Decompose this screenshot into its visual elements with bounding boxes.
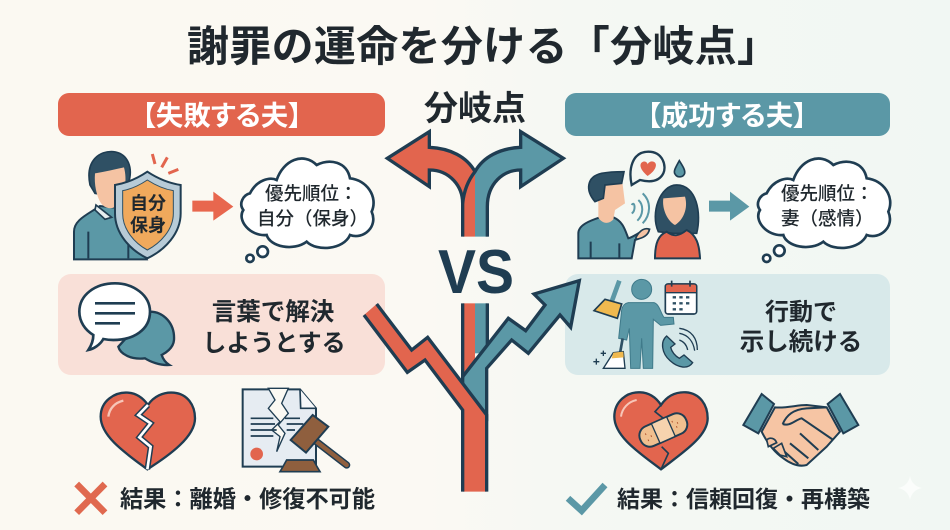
icon: check mark — [568, 485, 605, 511]
VS: VS — [438, 238, 514, 307]
icon: X mark — [77, 484, 105, 513]
thought cloud: left: 優先順位： — [265, 183, 358, 204]
thought cloud: left: 自分（保身） — [257, 208, 368, 229]
icon: broken heart — [101, 393, 195, 469]
icon: speech bubbles — [79, 283, 174, 365]
arrow: right to thought — [709, 192, 749, 221]
thought cloud: right: 優先順位： — [781, 183, 874, 204]
icon: man behind shield: 保身 — [130, 216, 166, 236]
icon: torn document and gavel — [243, 388, 347, 472]
thought cloud: right: 妻（感情） — [781, 208, 874, 229]
right action panel: 示し続ける — [740, 328, 862, 356]
left action panel — [58, 274, 385, 375]
icon: man behind shield: 自分 — [130, 193, 166, 213]
thought cloud: right — [758, 159, 890, 262]
diverging zigzag arrows — [364, 281, 579, 492]
left result text: 結果：離婚・修復不可能 — [120, 486, 375, 512]
forked arrow at top — [387, 132, 563, 237]
right header: successful husband: 【成功する夫】 — [647, 100, 807, 131]
right header: successful husband — [565, 93, 890, 136]
left header: failing husband — [58, 93, 385, 136]
panel text: words: 言葉で解決 — [212, 298, 334, 326]
center label: turning point: 分岐点 — [424, 90, 526, 128]
panel text: actions: 行動で — [765, 299, 837, 326]
thought cloud: left — [241, 159, 374, 262]
icon: cleaning, calendar, phone — [593, 279, 697, 368]
right action panel — [565, 274, 890, 375]
icon: man behind shield — [74, 152, 181, 259]
title: 謝罪の運命を分ける「分岐点」 — [187, 23, 779, 70]
icon: handshake — [743, 394, 858, 466]
icon: couple talking — [578, 152, 700, 258]
left header: failing husband: 【失敗する夫】 — [142, 100, 302, 131]
icon: bandaged heart — [614, 392, 708, 469]
sparkle — [898, 476, 922, 500]
arrow: left to thought — [192, 192, 233, 221]
left action panel: しようとする — [202, 330, 346, 357]
right result text: 結果：信頼回復・再構築 — [617, 486, 870, 512]
